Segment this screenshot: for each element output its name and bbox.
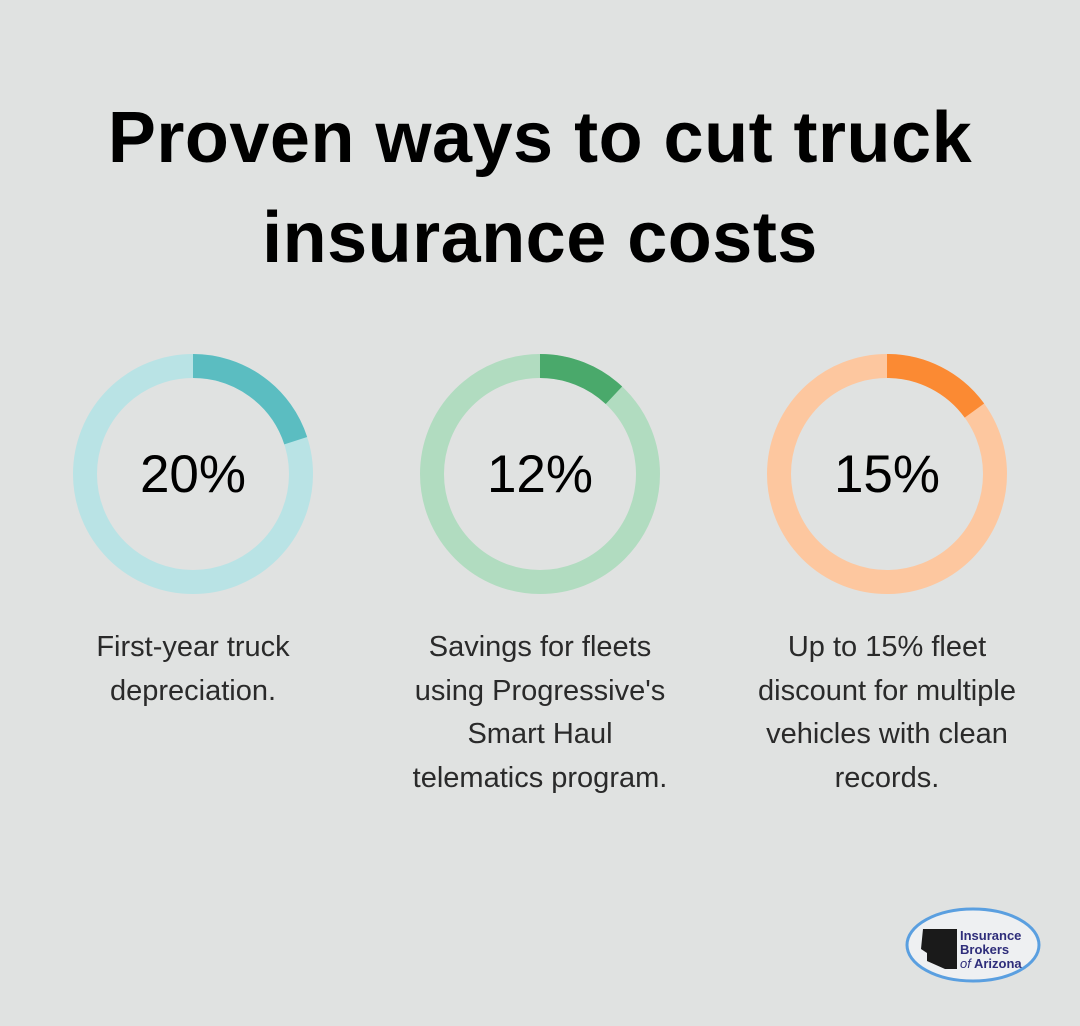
title [108,98,972,278]
text: telematics: using Progressive's [415,674,665,706]
text: telematics: telematics program. [413,762,667,794]
text: telematics: Smart Haul [467,718,613,750]
title: insurance costs [262,198,818,278]
donut: 20% [73,354,313,594]
text: telematics: Savings for fleets [429,631,651,663]
donut: 20%: 20% [140,445,246,504]
text: fleet discount: Up to 15% fleet [788,631,986,663]
logo [906,908,1040,982]
text: depreciation [96,631,290,706]
title: Proven ways to cut truck [108,98,972,178]
text: telematics [413,631,667,794]
text: depreciation: First-year truck [96,631,290,663]
text: fleet discount: vehicles with clean [766,718,1008,750]
text: depreciation: depreciation. [110,674,276,706]
text: fleet discount: records. [835,762,939,794]
logo: of Arizona [960,956,1022,971]
donut: 12%: 12% [487,445,593,504]
donut: 15%: 15% [834,445,940,504]
logo: Insurance [960,928,1021,943]
donut: 15% [767,354,1007,594]
donut: 12% [420,354,660,594]
text: fleet discount: discount for multiple [758,674,1016,706]
text: fleet discount [758,631,1016,794]
logo: Brokers [960,942,1009,957]
